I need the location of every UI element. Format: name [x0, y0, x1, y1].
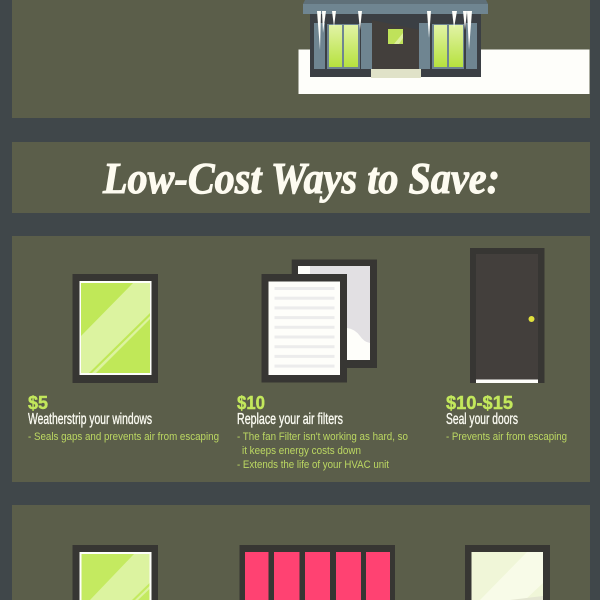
icon: frosted window [465, 545, 550, 600]
icon: weatherstripped window [72, 274, 158, 383]
tip: air filters: - Extends the life of your HVAC unit [237, 459, 389, 471]
tip: weatherstrip: Weatherstrip your windows [28, 411, 152, 428]
icon: door [470, 248, 544, 383]
icon: pink shades window [240, 545, 395, 600]
panel: heading band [12, 142, 590, 213]
snow ground [298, 50, 590, 94]
icon: air filters [262, 260, 377, 382]
title: Low-Cost Ways to Save: [102, 154, 500, 203]
tip: weatherstrip [28, 393, 219, 443]
panel: first row of tips [12, 236, 590, 482]
icon: green window [72, 545, 158, 600]
tip: seal doors: $10-$15 [446, 393, 513, 413]
tip: weatherstrip: $5 [28, 393, 48, 413]
panel: second row of tips [12, 505, 590, 600]
tip: seal doors: Seal your doors [446, 411, 518, 428]
tip: air filters: it keeps energy costs down [242, 445, 361, 457]
tip: seal doors [446, 393, 567, 443]
icon: house with icicles [303, 0, 488, 78]
panel: house scene [12, 0, 590, 118]
tip: air filters [237, 393, 408, 471]
tip: weatherstrip: - Seals gaps and prevents air from escaping [28, 431, 219, 443]
tip: seal doors: - Prevents air from escaping [446, 431, 567, 443]
tip: air filters: - The fan Filter isn't working as hard, so [237, 431, 408, 443]
tip: air filters: $10 [237, 393, 265, 413]
tip: air filters: Replace your air filters [237, 411, 343, 428]
